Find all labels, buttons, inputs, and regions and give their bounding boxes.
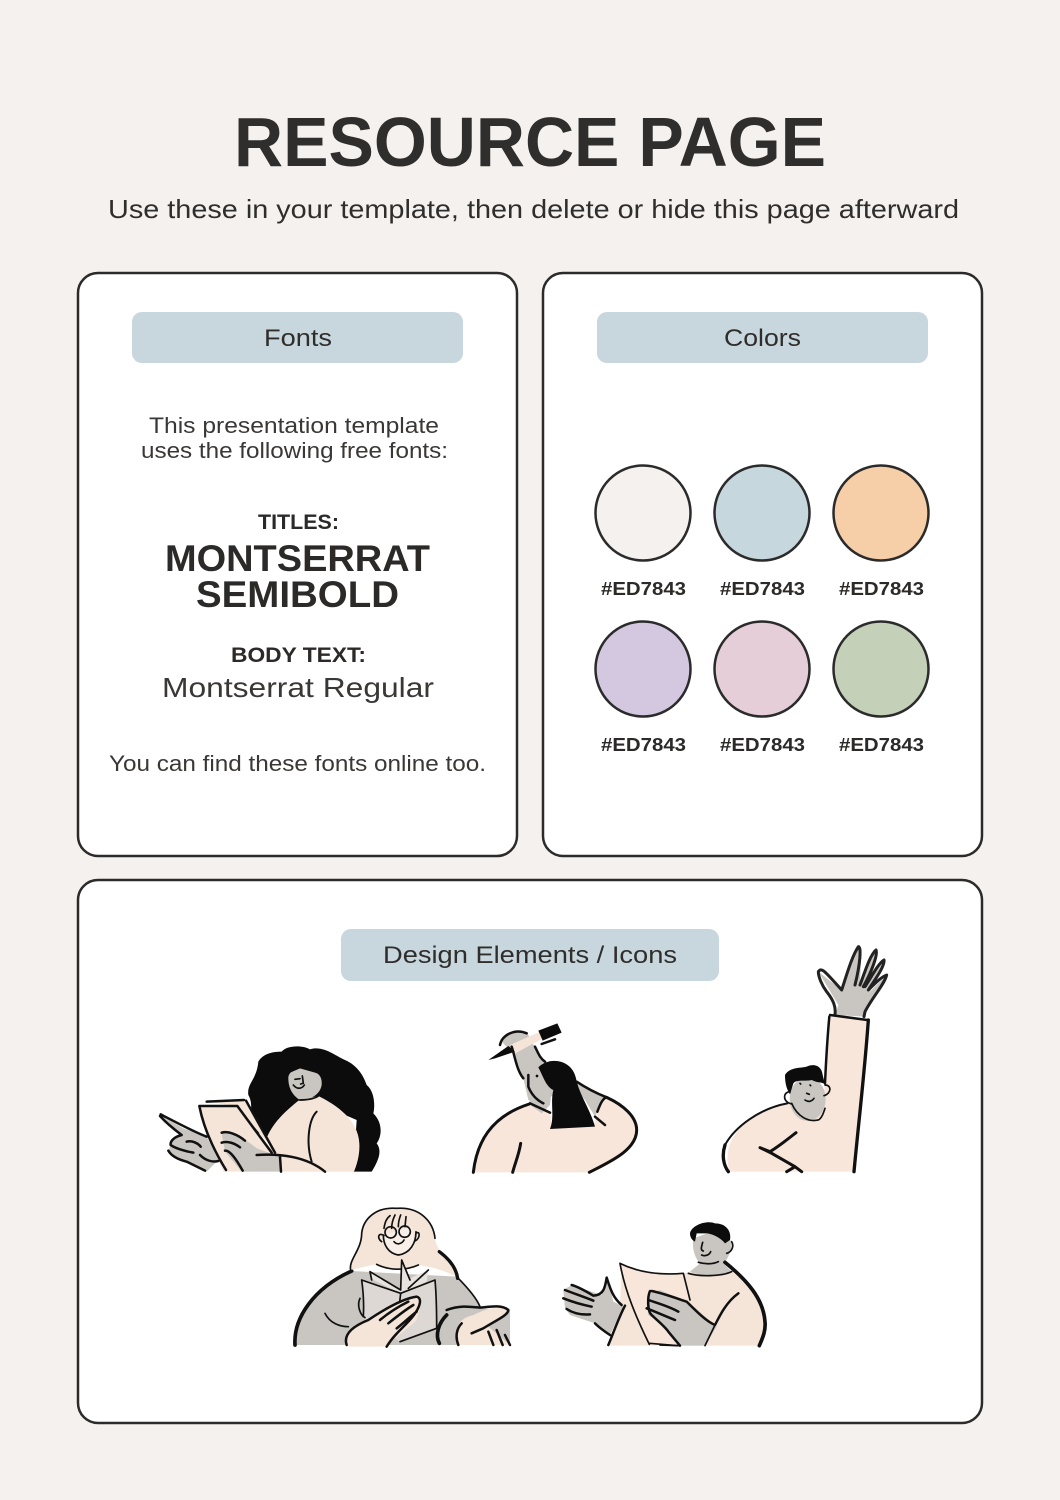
body font name: Montserrat Regular xyxy=(162,672,434,703)
swatch: pink: #ED7843 xyxy=(720,735,805,755)
body text label: BODY TEXT: xyxy=(231,644,366,667)
panel: fonts xyxy=(78,273,517,856)
icon: man presenting paper xyxy=(563,1222,765,1346)
design elements heading pill xyxy=(341,929,719,981)
design elements heading pill: Design Elements / Icons xyxy=(383,942,677,969)
title: RESOURCE PAGE xyxy=(234,103,826,181)
swatch: pink xyxy=(714,622,810,755)
icon: man raising hand xyxy=(723,947,887,1172)
fonts intro text: uses the following free fonts: xyxy=(141,438,448,463)
titles font name xyxy=(165,538,430,615)
swatch: blue xyxy=(714,466,810,599)
subtitle: Use these in your template, then delete or hide this page afterward xyxy=(108,194,959,224)
fonts heading pill: Fonts xyxy=(264,325,332,352)
fonts heading pill xyxy=(132,312,463,363)
colors heading pill xyxy=(597,312,928,363)
titles font label: TITLES: xyxy=(258,511,339,534)
fonts intro text xyxy=(141,413,448,463)
icon: woman with glasses reading book xyxy=(295,1208,510,1347)
icon: woman holding marker xyxy=(473,1023,637,1172)
titles font name: MONTSERRAT xyxy=(165,538,430,579)
swatch: blue: #ED7843 xyxy=(720,579,805,599)
swatch: off white: #ED7843 xyxy=(601,579,686,599)
titles font name: SEMIBOLD xyxy=(196,574,399,615)
panel: design elements xyxy=(78,880,982,1423)
swatch: peach xyxy=(834,466,928,599)
swatch: lilac: #ED7843 xyxy=(601,735,686,755)
fonts footnote: You can find these fonts online too. xyxy=(109,751,486,776)
swatch: sage xyxy=(834,622,928,755)
swatch: peach: #ED7843 xyxy=(839,579,924,599)
panel: colors xyxy=(543,273,982,856)
swatch: off white xyxy=(596,466,690,599)
colors heading pill: Colors xyxy=(724,325,801,352)
swatch: sage: #ED7843 xyxy=(839,735,924,755)
icon: woman with curly hair reading xyxy=(160,1046,381,1172)
swatch: lilac xyxy=(596,622,690,755)
fonts intro text: This presentation template xyxy=(149,413,439,438)
